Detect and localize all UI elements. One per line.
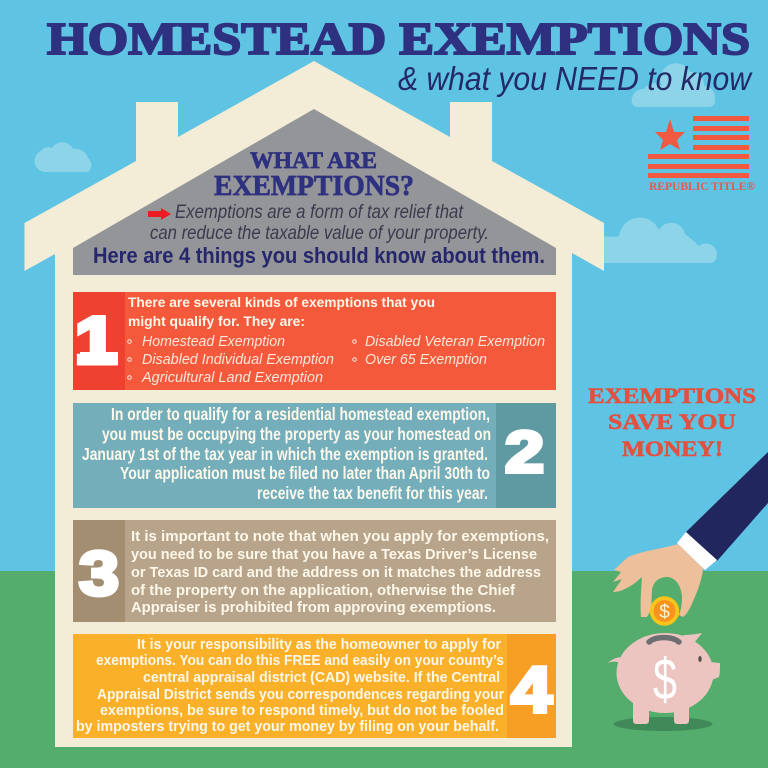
description line 2: can reduce the taxable value of your property. <box>150 223 489 244</box>
gable background <box>73 109 556 275</box>
body text: central appraisal district (CAD) website. If the Central <box>143 670 500 686</box>
logo name: REPUBLIC TITLE® <box>649 179 755 193</box>
callout: exemptions save you money: SAVE YOU <box>608 409 736 434</box>
snout <box>700 650 720 692</box>
coin dollar sign: $ <box>659 602 670 623</box>
exemption list: Over 65 Exemption <box>365 351 487 368</box>
number 2: 2 <box>505 420 544 485</box>
panel: what are exemptions <box>73 109 556 275</box>
callout: exemptions save you money: MONEY! <box>622 436 723 461</box>
body text: you need to be sure that you have a Texas Driver’s License <box>131 546 537 563</box>
body text <box>131 528 549 616</box>
body text <box>82 404 491 503</box>
body text: Appraiser is prohibited from approving exemptions. <box>131 599 496 616</box>
exemption list: Homestead Exemption <box>142 333 285 350</box>
description line 1: Exemptions are a form of tax relief that <box>175 202 464 223</box>
icon: red arrow <box>148 208 171 220</box>
panel: item 4 <box>73 634 556 738</box>
body text: January 1st of the tax year in which the exemption is granted. <box>82 444 488 464</box>
panel: item 2 <box>73 403 556 508</box>
body text: exemptions. You can do this FREE and easily on your county’s <box>96 653 504 669</box>
intro text: There are several kinds of exemptions that you <box>128 294 435 310</box>
icon: hand with coin <box>613 452 768 626</box>
coin <box>650 596 679 626</box>
cloud: lower right <box>590 218 717 263</box>
eye <box>698 656 702 662</box>
ear <box>683 633 702 645</box>
body text: of the property on the application, otherwise the Chief <box>131 582 516 599</box>
grass <box>0 571 768 768</box>
body text: Appraisal District sends you correspondences regarding your <box>97 687 504 703</box>
body text <box>76 637 504 735</box>
exemption list <box>128 333 545 386</box>
logo: Republic Title <box>648 116 755 193</box>
cloud: left <box>35 142 91 172</box>
legs <box>633 700 689 724</box>
callout: exemptions save you money <box>588 383 756 461</box>
hand <box>613 544 703 617</box>
body text: by imposters trying to get your money by filing on your behalf. <box>76 719 499 735</box>
body text: It is your responsibility as the homeowner to apply for <box>137 637 501 653</box>
icon: piggy bank <box>608 633 720 731</box>
intro text: might qualify for. They are: <box>128 313 305 329</box>
exemption list: Disabled Individual Exemption <box>142 351 334 368</box>
sky background <box>0 0 768 572</box>
panel: item 3 <box>73 520 556 622</box>
tail <box>608 657 623 664</box>
cloud: top right <box>632 63 715 107</box>
dollar sign: $ <box>653 647 677 712</box>
number 1: 1 <box>75 303 117 377</box>
exemption list: Disabled Veteran Exemption <box>365 333 545 350</box>
shadow <box>614 717 712 731</box>
number 4: 4 <box>511 653 552 726</box>
body text: or Texas ID card and the address on it matches the address <box>131 564 541 581</box>
coin slot <box>649 638 679 642</box>
body text: In order to qualify for a residential homestead exemption, <box>111 404 490 424</box>
icon: star <box>655 119 685 150</box>
callout: exemptions save you money: EXEMPTIONS <box>588 383 756 408</box>
icon: flag stripes <box>648 116 749 178</box>
lead-in: Here are 4 things you should know about them. <box>93 243 545 268</box>
number 3: 3 <box>79 540 119 609</box>
exemption list: Agricultural Land Exemption <box>141 369 323 386</box>
body text: Your application must be filed no later than April 30th to <box>120 463 490 483</box>
body text: It is important to note that when you apply for exemptions, <box>131 528 549 545</box>
house <box>24 61 604 747</box>
sleeve <box>686 452 768 561</box>
title: HOMESTEAD EXEMPTIONS <box>47 13 750 64</box>
panel: item 1 <box>73 292 556 390</box>
body <box>616 633 714 713</box>
heading: WHAT ARE <box>250 148 377 173</box>
intro text <box>128 294 435 329</box>
body text: receive the tax benefit for this year. <box>257 483 488 503</box>
body text: exemptions, be sure to respond timely, but do not be fooled <box>100 703 504 719</box>
heading: EXEMPTIONS? <box>214 170 414 202</box>
body text: you must be occupying the property as your homestead on <box>102 424 491 444</box>
cuff <box>677 532 717 570</box>
